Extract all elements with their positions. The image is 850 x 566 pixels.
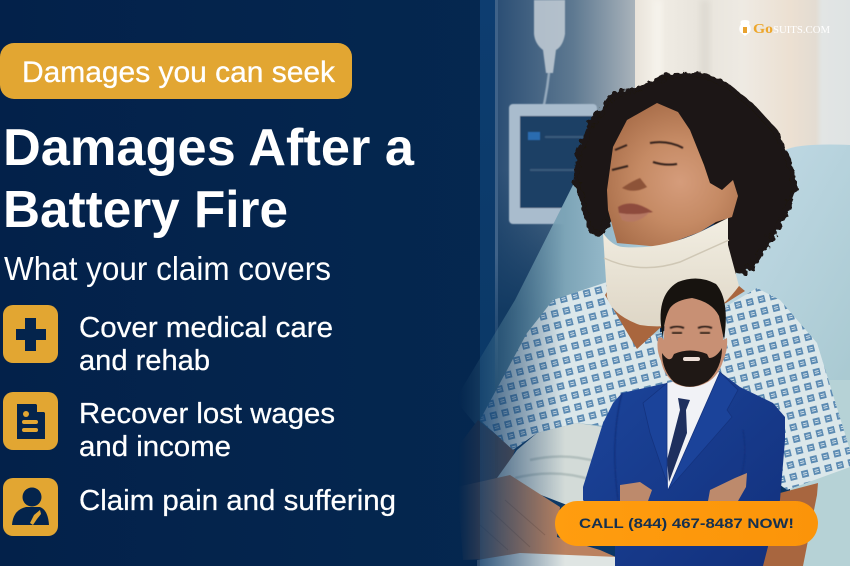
logo: GoSuits.com: SUITS.COM — [773, 24, 830, 36]
icon: person with hand on chest — [3, 478, 58, 536]
text: lost wages: Recover lost wages — [79, 398, 335, 430]
icon: document — [3, 392, 58, 450]
text: medical care: Cover medical care — [79, 312, 333, 344]
patient face — [607, 103, 738, 247]
subtitle: What your claim covers — [4, 250, 331, 287]
patient hands — [457, 475, 618, 560]
attorney eyes and brows — [670, 326, 712, 333]
text: lost wages — [79, 398, 335, 463]
attorney suit — [583, 372, 785, 566]
logo: GoSuits.com — [739, 20, 830, 37]
logo: GoSuits.com: Go — [753, 22, 773, 37]
attorney portrait — [583, 278, 785, 566]
patient neck — [605, 286, 745, 349]
icon: medical cross — [3, 305, 58, 363]
neck brace — [603, 218, 739, 326]
right pillow and bed sheet — [700, 145, 850, 566]
title: Battery Fire — [3, 181, 288, 239]
patient gown — [480, 282, 850, 490]
item: lost wages — [3, 392, 335, 463]
attorney suit seams — [615, 393, 745, 500]
text: lost wages: and income — [79, 431, 231, 463]
patient: woman in neck brace — [440, 74, 850, 566]
text: medical care: and rehab — [79, 345, 210, 377]
call to action button: CALL (844) 467-8487 NOW! — [579, 515, 794, 531]
patient nose and mouth — [618, 178, 653, 222]
lower blanket — [477, 553, 618, 566]
title: Damages After a — [3, 119, 415, 177]
patient eyebrows and closed eyes — [612, 142, 683, 170]
attorney beard — [662, 348, 722, 387]
attorney tie — [667, 398, 690, 482]
text: pain and suffering: Claim pain and suffering — [79, 485, 396, 517]
attorney shirt — [667, 372, 720, 490]
text: medical care — [79, 312, 333, 377]
patient hair — [576, 74, 795, 272]
call to action button — [555, 501, 818, 546]
attorney smile — [683, 357, 700, 361]
attorney lapels — [643, 372, 738, 490]
left pillow — [470, 185, 660, 433]
photo: hospital room background — [480, 0, 850, 566]
patient right arm — [755, 483, 818, 566]
badge: Damages you can seek — [0, 43, 352, 99]
item: medical care — [3, 305, 333, 377]
attorney head — [657, 296, 727, 387]
item: pain and suffering — [3, 478, 396, 536]
blanket — [497, 423, 602, 504]
IV bag and line — [527, 0, 565, 205]
attorney crossed hands — [620, 473, 747, 501]
title — [3, 119, 415, 239]
badge: Damages you can seek: Damages you can seek — [22, 56, 336, 89]
patient forearm — [468, 420, 515, 484]
attorney hair — [661, 278, 726, 340]
vital signs monitor — [509, 104, 598, 224]
